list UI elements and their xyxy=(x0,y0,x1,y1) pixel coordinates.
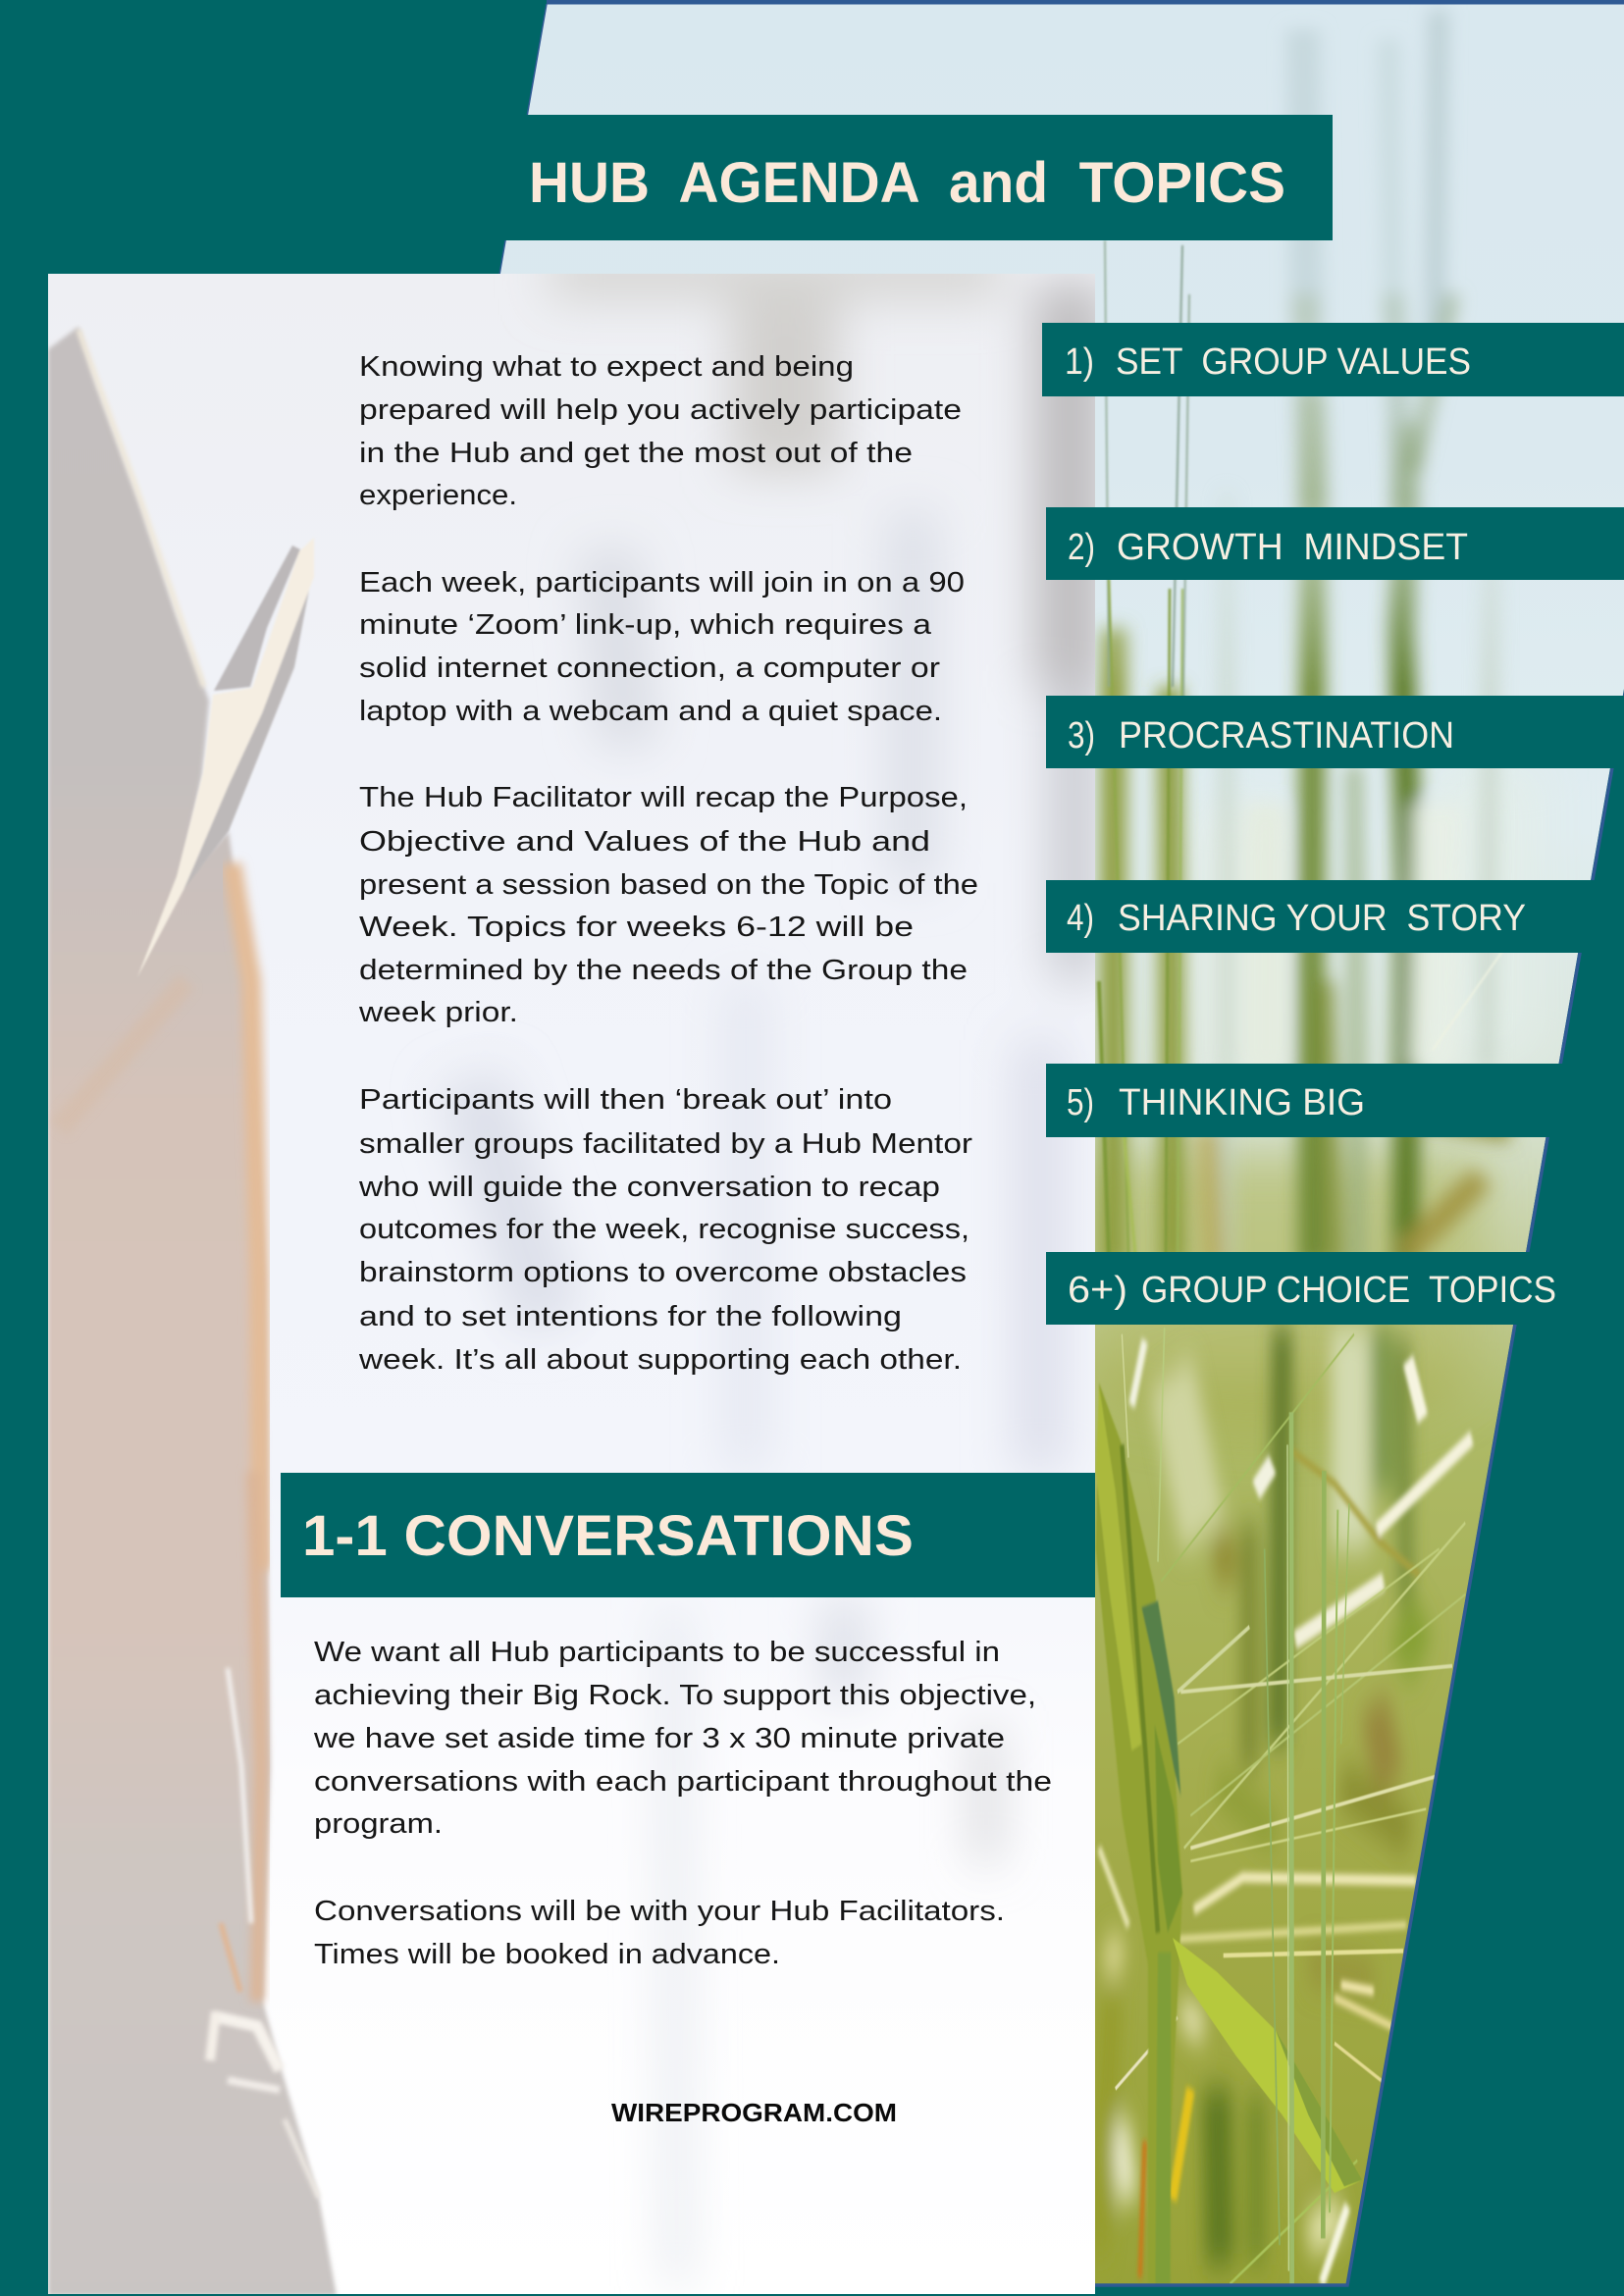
jacket collar xyxy=(210,2011,319,2198)
topic 1: SET GROUP VALUES xyxy=(1116,341,1471,383)
text block: weekly zoom link-up: minute ‘Zoom’ link-up, which requires a xyxy=(359,609,932,641)
photo blue edge xyxy=(499,2,1624,2285)
text block: break out groups: Participants will then ‘break out’ into xyxy=(359,1084,892,1116)
section banner: 1-1 conversations: 1-1 CONVERSATIONS xyxy=(302,1504,914,1568)
title banner xyxy=(500,115,1333,240)
text block: hub facilitator: Week. Topics for weeks 6-12 will be xyxy=(359,912,914,943)
text block: weekly zoom link-up: Each week, participants will join in on a 90 xyxy=(359,567,965,599)
text block: hub facilitator: present a session based on the Topic of the xyxy=(359,869,978,901)
text block: break out groups: brainstorm options to overcome obstacles xyxy=(359,1257,967,1288)
barley stalk xyxy=(1096,1383,1182,2284)
text block: 1-1 conversations objective xyxy=(313,1637,1052,1840)
title banner: HUB AGENDA and TOPICS xyxy=(529,151,1285,215)
website link: WIREPROGRAM.COM xyxy=(611,2098,897,2127)
text block: break out groups: smaller groups facilitated by a Hub Mentor xyxy=(359,1128,972,1160)
topic 3: PROCRASTINATION xyxy=(1119,715,1454,757)
text block: what to expect: prepared will help you actively participate xyxy=(359,394,962,426)
panel: faded photo text panel xyxy=(48,274,1095,2296)
topic 5: THINKING BIG xyxy=(1119,1082,1365,1123)
topic 3 xyxy=(1046,696,1624,768)
text block: break out groups: outcomes for the week, recognise success, xyxy=(359,1214,969,1245)
topic 5 xyxy=(1046,1064,1624,1137)
text block: hub facilitators booking: Conversations will be with your Hub Facilitators. xyxy=(314,1896,1005,1927)
text block: 1-1 conversations objective: conversations with each participant throughout the xyxy=(314,1766,1052,1798)
text block: what to expect: in the Hub and get the most out of the xyxy=(359,438,913,469)
topic 5: 5) xyxy=(1067,1082,1094,1123)
text block: break out groups: and to set intentions for the following xyxy=(359,1301,902,1332)
text block: weekly zoom link-up: laptop with a webcam and a quiet space. xyxy=(359,696,942,727)
topic 4 xyxy=(1046,880,1624,953)
text block: hub facilitator: determined by the needs of the Group the xyxy=(359,955,968,986)
text block: 1-1 conversations objective: we have set aside time for 3 x 30 minute private xyxy=(313,1723,1005,1754)
photo: barley grass field xyxy=(491,0,1624,2296)
topic 6+: GROUP CHOICE TOPICS xyxy=(1141,1270,1556,1311)
topic 2: GROWTH MINDSET xyxy=(1117,527,1468,568)
text block: weekly zoom link-up xyxy=(359,567,965,727)
topic 2: 2) xyxy=(1068,527,1095,568)
text block: break out groups xyxy=(358,1084,972,1376)
topic 1 xyxy=(1042,323,1624,396)
text block: what to expect: Knowing what to expect and being xyxy=(359,351,854,383)
text block: break out groups: who will guide the conversation to recap xyxy=(358,1172,940,1203)
topic 3: 3) xyxy=(1068,715,1095,757)
text block: hub facilitator: The Hub Facilitator will recap the Purpose, xyxy=(359,782,968,813)
topic 6+ xyxy=(1046,1252,1624,1325)
text block: hub facilitator: week prior. xyxy=(358,997,518,1028)
hat brim xyxy=(137,538,314,977)
topic 1: 1) xyxy=(1065,341,1094,383)
text block: hub facilitator: Objective and Values of the Hub and xyxy=(359,826,930,858)
text block: hub facilitator xyxy=(358,782,978,1028)
topic 4: SHARING YOUR STORY xyxy=(1118,898,1526,939)
text block: break out groups: week. It’s all about supporting each other. xyxy=(358,1344,962,1376)
topic 6+: 6+) xyxy=(1068,1270,1127,1311)
text block: weekly zoom link-up: solid internet connection, a computer or xyxy=(359,652,940,684)
text block: what to expect xyxy=(359,351,962,511)
text block: 1-1 conversations objective: We want all Hub participants to be successful in xyxy=(314,1637,1000,1668)
text block: hub facilitators booking xyxy=(314,1896,1005,1970)
bright leaf xyxy=(1173,1938,1362,2193)
text block: 1-1 conversations objective: program. xyxy=(314,1808,443,1840)
faded figure with hat xyxy=(48,327,337,2296)
topic 2 xyxy=(1046,507,1624,580)
section banner: 1-1 conversations xyxy=(281,1473,1095,1597)
topic 4: 4) xyxy=(1067,898,1094,939)
text block: what to expect: experience. xyxy=(359,480,517,511)
text block: 1-1 conversations objective: achieving their Big Rock. To support this objective, xyxy=(314,1680,1036,1711)
text block: hub facilitators booking: Times will be booked in advance. xyxy=(314,1939,780,1970)
